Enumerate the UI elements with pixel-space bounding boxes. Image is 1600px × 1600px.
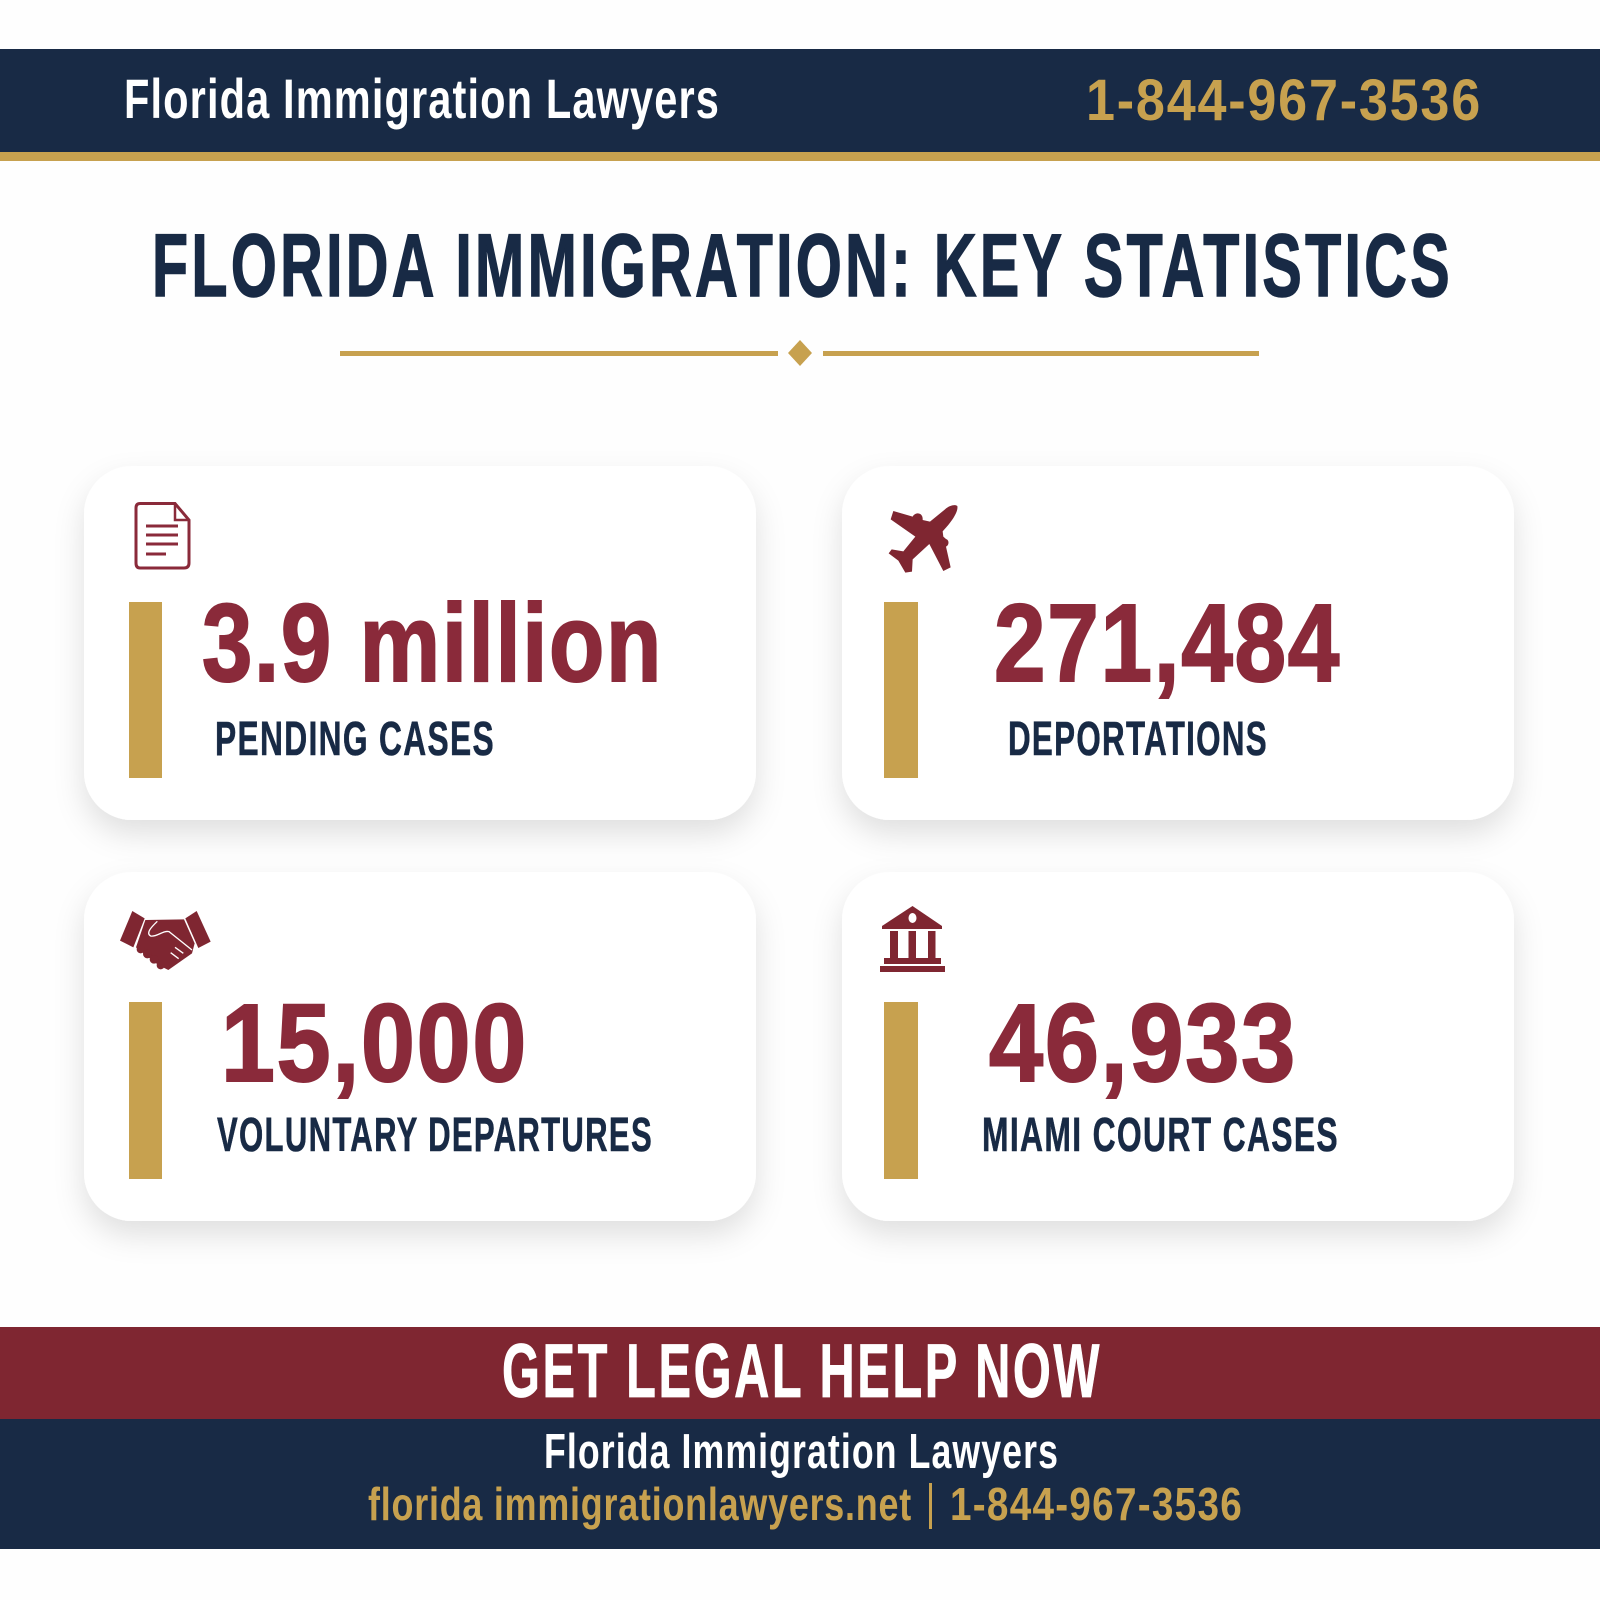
panel: voluntary departures [84, 872, 756, 1221]
footer contact line: 1-844-967-3536 [950, 1478, 1243, 1530]
value: 15,000 [221, 982, 528, 1105]
title divider [340, 340, 1259, 366]
panel: deportations [842, 466, 1514, 820]
footer band [0, 1419, 1600, 1549]
footer firm name: Florida Immigration Lawyers [544, 1425, 1059, 1479]
accent bar [129, 1002, 162, 1179]
label: DEPORTATIONS [1008, 713, 1268, 766]
label: MIAMI COURT CASES [982, 1109, 1339, 1162]
firm name: Florida Immigration Lawyers [124, 67, 720, 130]
header band [0, 49, 1600, 161]
value: 46,933 [989, 982, 1297, 1105]
call to action band [0, 1327, 1600, 1419]
phone number: 1-844-967-3536 [1086, 68, 1482, 133]
accent bar [129, 602, 162, 778]
label: VOLUNTARY DEPARTURES [217, 1109, 653, 1162]
footer contact line: florida immigrationlawyers.net [368, 1478, 912, 1530]
label: PENDING CASES [215, 713, 495, 766]
call to action heading: GET LEGAL HELP NOW [502, 1329, 1102, 1414]
icon: document [136, 504, 189, 568]
accent bar [884, 1002, 918, 1179]
panel: miami court cases [842, 872, 1514, 1221]
panel: pending cases [84, 466, 756, 820]
value: 3.9 million [202, 582, 663, 705]
icon: handshake [120, 911, 211, 970]
icon: courthouse [880, 906, 945, 972]
icon: airplane [889, 505, 957, 573]
value: 271,484 [994, 582, 1341, 705]
accent bar [884, 602, 918, 778]
